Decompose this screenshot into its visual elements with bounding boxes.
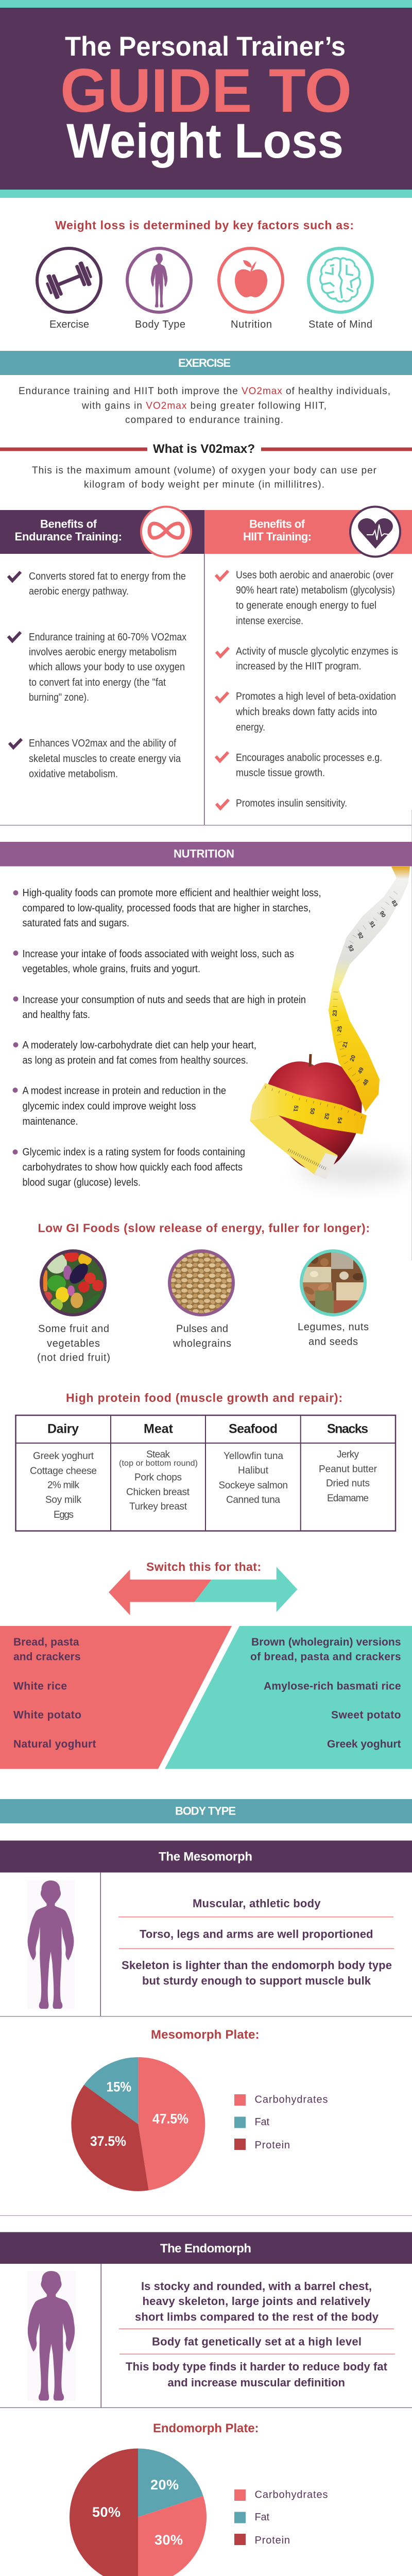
list: nutrition advice: carbohydrates to show how quickly each food affects	[23, 1162, 243, 1173]
list: nutrition advice: maintenance.	[23, 1116, 78, 1127]
factor: nutrition: Nutrition	[231, 319, 272, 330]
factor: exercise: Exercise	[49, 319, 89, 330]
column: dairy: 2% milk	[47, 1480, 79, 1491]
panel: benefits of endurance training: Endurance Training:	[14, 530, 122, 543]
panel: benefits of HIIT training: Benefits of	[249, 517, 305, 531]
panel: switch to: Brown (wholegrain) versions	[251, 1636, 401, 1648]
measuring tape: 54	[336, 1116, 343, 1124]
list: nutrition advice: saturated fats and sugars.	[23, 918, 129, 929]
food: pulses and wholegrains	[169, 1251, 233, 1349]
list: nutrition advice: High-quality foods can promote more efficient and healthier weight loss,	[23, 887, 321, 899]
factor: exercise	[37, 248, 101, 330]
traits: mesomorph	[118, 1897, 394, 1987]
panel: the endomorph	[0, 2232, 412, 2408]
measuring tape: 93	[347, 944, 355, 953]
text: endurance vs HIIT intro: Endurance training and HIIT both improve the VO2max of healthy individuals,	[19, 386, 390, 397]
label: vegetables	[47, 1338, 100, 1349]
measuring tape: 91	[368, 920, 376, 929]
panel: benefits of HIIT training	[204, 507, 412, 556]
measuring tape: 23	[332, 1010, 338, 1016]
heading: what is VO2max	[0, 442, 412, 456]
label	[173, 1323, 231, 1349]
traits: endomorph: Is stocky and rounded, with a barrel chest,	[141, 2280, 372, 2293]
heading: high protein food: High protein food (muscle growth and repair):	[66, 1391, 342, 1404]
legend: mesomorph plate	[234, 2094, 328, 2151]
text: VO2max definition: This is the maximum amount (volume) of oxygen your body can use per	[32, 465, 377, 476]
pie chart: endomorph plate: 50%	[92, 2504, 121, 2520]
panel: benefits of endurance training: Benefits of	[40, 517, 97, 531]
measuring tape: 25	[336, 1025, 344, 1033]
title	[60, 31, 352, 168]
panel: switch from	[0, 1626, 232, 1769]
food: legumes, nuts and seeds	[298, 1251, 369, 1348]
column: dairy: Cottage cheese	[30, 1466, 97, 1477]
panel: the mesomorph: The Mesomorph	[159, 1850, 252, 1864]
label	[37, 1323, 110, 1363]
label: (not dried fruit)	[37, 1352, 110, 1363]
column: snacks: Snacks	[327, 1422, 368, 1436]
heading: key factors: Weight loss is determined by key factors such as:	[55, 218, 354, 232]
legend: mesomorph plate: Carbohydrates	[254, 2094, 328, 2105]
column: seafood: Yellowfin tuna	[224, 1451, 283, 1462]
section banner: nutrition: NUTRITION	[174, 847, 234, 860]
column: seafood: Sockeye salmon	[218, 1480, 288, 1491]
figure: mesomorph	[28, 1880, 75, 2009]
list: nutrition advice: A modest increase in protein and reduction in the	[23, 1085, 226, 1096]
list: HIIT benefits: 90% heart rate) metabolism (glycolysis)	[236, 585, 395, 596]
label: Legumes, nuts	[298, 1321, 369, 1333]
list: HIIT benefits: energy.	[236, 722, 265, 733]
measuring tape: 83	[390, 900, 399, 908]
legend: mesomorph plate: Protein	[254, 2140, 290, 2151]
column: seafood: Halibut	[238, 1465, 269, 1476]
panel: switch from: Bread, pasta	[13, 1636, 79, 1648]
arrows: switch	[109, 1567, 298, 1615]
traits: endomorph	[119, 2280, 395, 2389]
column: snacks: Dried nuts	[326, 1478, 370, 1489]
factor: state of mind: State of Mind	[308, 319, 372, 330]
photo: grains	[170, 1252, 232, 1314]
icon: body silhouette	[151, 253, 167, 308]
list: endurance benefits: oxidative metabolism.	[29, 769, 118, 780]
column: snacks: Jerky	[337, 1449, 359, 1460]
panel: switch to: of bread, pasta and crackers	[250, 1651, 401, 1663]
column: dairy: Greek yoghurt	[33, 1451, 94, 1462]
list: endurance benefits: which allows your body to use oxygen	[28, 662, 185, 673]
factor: state of mind	[308, 248, 372, 330]
list: nutrition advice: blood sugar (glucose) levels.	[23, 1177, 141, 1188]
list: HIIT benefits: Promotes insulin sensitivity.	[236, 798, 347, 809]
panel: switch from: Natural yoghurt	[13, 1738, 96, 1750]
list: nutrition advice: Increase your consumption of nuts and seeds that are high in protein	[23, 994, 306, 1006]
list: HIIT benefits: increased by the HIIT program.	[236, 660, 362, 672]
panel: switch to: Amylose-rich basmati rice	[264, 1681, 401, 1692]
panel: switch to: Greek yoghurt	[327, 1738, 401, 1750]
pie chart: mesomorph plate	[71, 2057, 205, 2191]
list: HIIT benefits: Activity of muscle glycolytic enzymes is	[236, 646, 398, 657]
list: nutrition advice: vegetables, whole grains, fruits and yogurt.	[23, 963, 200, 975]
measuring tape: 49	[357, 1066, 365, 1075]
heading: endomorph plate: Endomorph Plate:	[153, 2421, 259, 2435]
title: Weight Loss	[66, 114, 344, 168]
text: endurance vs HIIT intro: compared to endurance training.	[125, 415, 283, 426]
section banner: body type	[0, 1799, 412, 1823]
panel: the endomorph: The Endomorph	[160, 2242, 251, 2256]
food: fruit and vegetables	[37, 1250, 110, 1363]
measuring tape: 52	[323, 1112, 330, 1120]
list: nutrition advice: compared to low-quality, processed foods that are higher in starches,	[23, 903, 311, 914]
label: wholegrains	[173, 1338, 231, 1349]
panel: benefits of endurance training	[0, 507, 204, 556]
heading: what is VO2max: What is V02max?	[153, 442, 255, 456]
legend: endomorph plate	[234, 2489, 328, 2546]
section banner: body type: BODY TYPE	[175, 1804, 236, 1818]
list: HIIT benefits: which breaks down fatty acids into	[235, 706, 377, 718]
photo: nuts	[303, 1252, 364, 1313]
list: endurance benefits: Enhances VO2max and the ability of	[29, 738, 176, 749]
section banner: nutrition	[0, 842, 412, 867]
list: endurance benefits	[8, 571, 186, 780]
factor: body type: Body Type	[135, 319, 185, 330]
panel: benefits of HIIT training: HIIT Training:	[243, 530, 312, 543]
pie chart: endomorph plate	[70, 2448, 207, 2576]
traits: mesomorph: Skeleton is lighter than the endomorph body type	[122, 1959, 392, 1972]
pie chart: mesomorph plate: 47.5%	[152, 2111, 188, 2127]
header panel	[0, 0, 412, 198]
column: snacks: Edamame	[327, 1493, 369, 1504]
measuring tape: 51	[292, 1105, 299, 1112]
list: endurance benefits: burning" zone).	[29, 692, 89, 703]
legend: endomorph plate: Fat	[254, 2512, 269, 2523]
list: HIIT benefits: Promotes a high level of beta-oxidation	[236, 691, 396, 702]
list: nutrition advice: Glycemic index is a rating system for foods containing	[23, 1147, 245, 1158]
label: Pulses and	[176, 1323, 228, 1334]
list: nutrition advice	[12, 887, 321, 1188]
text: VO2max definition	[32, 465, 377, 490]
figure: endomorph	[28, 2271, 75, 2401]
traits: endomorph: Body fat genetically set at a high level	[152, 2335, 362, 2348]
traits: mesomorph: Torso, legs and arms are well proportioned	[140, 1928, 373, 1940]
traits: endomorph: This body type finds it harder to reduce body fat	[126, 2360, 388, 2373]
column: meat: Turkey breast	[129, 1501, 187, 1512]
list: endurance benefits: skeletal muscles to create energy via	[29, 753, 181, 765]
list: endurance benefits: Converts stored fat to energy from the	[29, 571, 186, 582]
panel: switch from: and crackers	[13, 1651, 80, 1663]
list: HIIT benefits: Encourages anabolic processes e.g.	[236, 752, 382, 764]
heading: mesomorph plate: Mesomorph Plate:	[151, 2028, 260, 2042]
icon: infinity	[141, 507, 191, 556]
column: snacks: Peanut butter	[319, 1464, 377, 1475]
legend: endomorph plate: Carbohydrates	[254, 2489, 328, 2501]
column: meat: Steak	[146, 1449, 170, 1460]
icon: heart with pulse	[350, 507, 400, 556]
text: endurance vs HIIT intro: with gains in VO2max being greater following HIIT,	[81, 401, 327, 411]
factor: nutrition	[219, 248, 283, 330]
table: high protein foods	[15, 1415, 396, 1531]
text: VO2max definition: kilogram of body weight per minute (in millilitres).	[84, 479, 324, 490]
list: endurance benefits: to convert fat into energy (the "fat	[29, 677, 166, 688]
list: endurance benefits: involves aerobic energy metabolism	[29, 647, 177, 658]
measuring tape: 92	[356, 931, 364, 940]
column: dairy: Dairy	[47, 1422, 79, 1436]
panel: the mesomorph	[0, 1840, 412, 2016]
legend: endomorph plate: Protein	[254, 2535, 290, 2546]
panel: switch to: Sweet potato	[331, 1709, 401, 1721]
column: dairy: Soy milk	[45, 1495, 81, 1505]
heading: low GI foods: Low GI Foods (slow release of energy, fuller for longer):	[38, 1221, 370, 1234]
panel: switch to	[165, 1626, 412, 1769]
column: dairy	[30, 1422, 97, 1520]
measuring tape	[250, 867, 410, 1179]
measuring tape: 21	[341, 1041, 349, 1048]
column: meat: Pork chops	[134, 1472, 182, 1483]
traits: mesomorph: but sturdy enough to support muscle bulk	[142, 1974, 371, 1987]
measuring tape: 20	[349, 1054, 357, 1062]
label: Some fruit and	[38, 1323, 109, 1334]
column: snacks	[319, 1422, 377, 1504]
title: The Personal Trainer’s	[65, 31, 346, 62]
panel: switch from: White potato	[13, 1709, 81, 1721]
list: nutrition advice: as long as protein and fat comes from healthy sources.	[23, 1055, 248, 1066]
list: endurance benefits: aerobic energy pathway.	[29, 586, 129, 597]
factor: body type	[127, 248, 191, 330]
column: seafood	[218, 1422, 288, 1505]
pie chart: mesomorph plate: 37.5%	[90, 2133, 126, 2149]
column: meat: Meat	[144, 1422, 174, 1436]
title: GUIDE TO	[60, 56, 352, 125]
traits: endomorph: heavy skeleton, large joints and relatively	[142, 2295, 371, 2308]
measuring tape: 50	[308, 1107, 316, 1115]
pie chart: endomorph plate: 30%	[154, 2532, 183, 2548]
traits: endomorph: short limbs compared to the rest of the body	[135, 2310, 379, 2324]
list: HIIT benefits: intense exercise.	[236, 615, 303, 626]
image: apple with measuring tape	[250, 867, 412, 1184]
section banner: exercise	[0, 351, 412, 375]
icon: dumbbell	[43, 260, 95, 301]
column: meat: Chicken breast	[126, 1487, 190, 1498]
pie chart: endomorph plate: 20%	[150, 2477, 179, 2493]
photo: vegetables	[43, 1252, 104, 1313]
column: meat	[119, 1422, 198, 1512]
list: nutrition advice: A moderately low-carbohydrate diet can help your heart,	[23, 1040, 256, 1051]
traits: endomorph: and increase muscular definition	[168, 2376, 345, 2389]
legend: mesomorph plate: Fat	[254, 2116, 269, 2128]
heading: switch this for that: Switch this for that:	[146, 1560, 261, 1573]
column: meat: (top or bottom round)	[119, 1459, 198, 1468]
pie chart: mesomorph plate: 15%	[106, 2079, 131, 2095]
list: HIIT benefits: muscle tissue growth.	[236, 768, 325, 779]
list: HIIT benefits	[216, 570, 398, 809]
apple	[266, 1061, 362, 1171]
list: nutrition advice: Increase your intake of foods associated with weight loss, such as	[23, 948, 294, 960]
measuring tape: 48	[362, 1078, 370, 1087]
column: seafood: Seafood	[229, 1422, 278, 1436]
traits: mesomorph: Muscular, athletic body	[193, 1897, 321, 1910]
list: nutrition advice: glycemic index could improve weight loss	[23, 1100, 196, 1112]
list: nutrition advice: and healthy fats.	[23, 1009, 90, 1021]
icon: brain	[320, 258, 360, 302]
list: HIIT benefits: to generate enough energy to fuel	[236, 600, 376, 611]
column: seafood: Canned tuna	[226, 1495, 280, 1505]
label: and seeds	[308, 1336, 358, 1348]
label	[298, 1321, 369, 1348]
panel: switch from: White rice	[13, 1681, 67, 1692]
list: endurance benefits: Endurance training at 60-70% VO2max	[29, 632, 186, 643]
section banner: exercise: EXERCISE	[178, 357, 231, 369]
text: endurance vs HIIT intro	[19, 386, 390, 426]
list: HIIT benefits: Uses both aerobic and anaerobic (over	[236, 570, 393, 581]
measuring tape: 90	[378, 910, 387, 919]
icon: apple	[235, 260, 267, 297]
column: dairy: Eggs	[54, 1510, 74, 1520]
